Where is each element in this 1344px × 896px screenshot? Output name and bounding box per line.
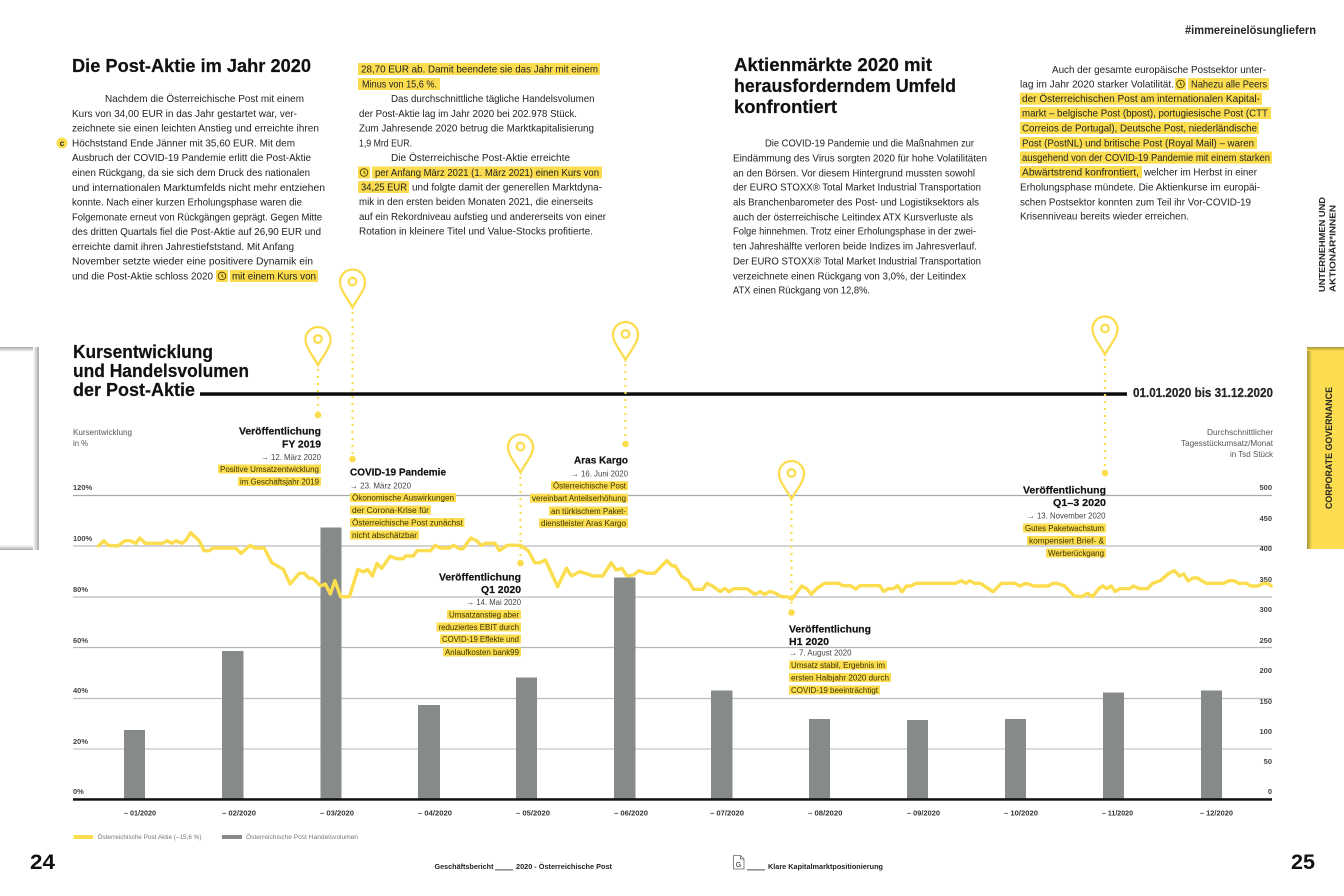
text block: column 3: an den Börsen. Vor diesem Hintergrund mussten sowohl bbox=[733, 168, 975, 180]
tab: corporate governance bbox=[1307, 347, 1344, 549]
marker: Veröffentlichung Q1-3 2020 bbox=[1092, 316, 1118, 476]
footer: chapter title: Klare Kapitalmarktpositionierung bbox=[768, 862, 883, 871]
month labels bbox=[124, 808, 1233, 818]
legend: Österreichische Post Handelsvolumen bbox=[246, 833, 358, 841]
text block: column 4: welcher im Herbst in einer bbox=[1143, 168, 1258, 178]
footer: report title bbox=[434, 862, 612, 871]
callout: Aras Kargo bbox=[530, 454, 628, 528]
callout: Veröffentlichung FY 2019 bbox=[218, 426, 321, 486]
callout: Veröffentlichung H1 2020: Veröffentlichung bbox=[789, 624, 871, 636]
heading: Aktienmärkte 2020: Aktienmärkte 2020 mit bbox=[734, 55, 932, 75]
month labels: – 10/2020 bbox=[1004, 808, 1038, 818]
text block: column 3: als Branchenbarometer des Post- und Logistiksektors als bbox=[733, 198, 979, 208]
left axis title bbox=[73, 428, 132, 448]
side label: Unternehmen und Aktionär*innen: AKTIONÄR*INNEN bbox=[1328, 205, 1338, 292]
callout: Veröffentlichung H1 2020: → 7. August 2020 bbox=[789, 648, 852, 658]
callout: Aras Kargo: → 16. Juni 2020 bbox=[571, 468, 628, 478]
text block: column 1: Kurs von 34,00 EUR in das Jahr gestartet war, ver- bbox=[72, 109, 297, 120]
marker: COVID-19 Pandemie bbox=[340, 270, 365, 462]
right axis title: in Tsd Stück bbox=[1230, 450, 1274, 459]
text block: column 2: 34,25 EUR bbox=[361, 182, 407, 194]
marker: Veröffentlichung Q1 2020 bbox=[508, 434, 533, 566]
text block: column 4: ausgehend von der COVID-19 Pandemie mit einem starken bbox=[1022, 153, 1270, 164]
month labels: – 02/2020 bbox=[222, 808, 256, 818]
month labels: – 05/2020 bbox=[516, 808, 550, 818]
text block: column 2: Das durchschnittliche tägliche Handelsvolumen bbox=[391, 94, 595, 105]
right axis labels: 350 bbox=[1259, 575, 1272, 584]
right axis title bbox=[1181, 428, 1274, 459]
callout: Veröffentlichung H1 2020: COVID-19 beeinträchtigt bbox=[791, 686, 879, 695]
callout: Veröffentlichung Q1-3 2020: Q1–3 2020 bbox=[1053, 497, 1106, 509]
text block: column 4: Nahezu alle Peers bbox=[1191, 80, 1267, 90]
text block: column 4: Auch der gesamte europäische Postsektor unter- bbox=[1052, 65, 1266, 76]
right axis title: Tagesstückumsatz/Monat bbox=[1181, 439, 1274, 448]
text block: column 1: November setzte wieder eine positivere Dynamik ein bbox=[72, 256, 313, 268]
left axis labels: 0% bbox=[73, 787, 84, 796]
month labels: – 12/2020 bbox=[1200, 808, 1233, 818]
callout: Aras Kargo: vereinbart Anteilserhöhung bbox=[532, 494, 626, 503]
right axis labels: 0 bbox=[1268, 787, 1272, 796]
share price line bbox=[98, 533, 1271, 599]
left axis title: in % bbox=[73, 439, 88, 448]
text block: column 1: und internationalen Marktumfelds nicht mehr entziehen bbox=[72, 183, 325, 194]
right axis labels: 500 bbox=[1259, 483, 1272, 492]
text block: column 2: 28,70 EUR ab. Damit beendete sie das Jahr mit einem bbox=[361, 64, 598, 76]
callout: Aras Kargo: Österreichische Post bbox=[553, 482, 627, 491]
callout: COVID-19 Pandemie bbox=[350, 466, 464, 540]
callout: Veröffentlichung Q1-3 2020: Gutes Paketwachstum bbox=[1025, 524, 1104, 533]
text block: column 3: ATX einen Rückgang von 12,8%. bbox=[733, 286, 870, 296]
text block: column 3: verzeichnete einen Rückgang von 3,0%, der Leitindex bbox=[733, 272, 967, 282]
heading: Aktienmärkte 2020: konfrontiert bbox=[734, 97, 837, 117]
left axis labels bbox=[73, 483, 93, 796]
marker: Veröffentlichung H1 2020 bbox=[779, 461, 804, 616]
text block: column 3: Der EURO STOXX® Total Market Industrial Transportation bbox=[733, 256, 981, 268]
callout: Veröffentlichung FY 2019: Positive Umsatzentwicklung bbox=[220, 465, 319, 474]
callout: COVID-19 Pandemie: der Corona-Krise für bbox=[352, 506, 429, 515]
icon: document G: G bbox=[736, 862, 741, 869]
right axis labels bbox=[1259, 483, 1272, 796]
text block: column 4: lag im Jahr 2020 starker Volatilität. bbox=[1020, 80, 1174, 90]
month labels: – 09/2020 bbox=[907, 808, 940, 818]
callout: Veröffentlichung Q1-3 2020: Veröffentlichung bbox=[1023, 484, 1106, 496]
volume bars bbox=[124, 528, 1222, 799]
text block: column 4: Abwärtstrend konfrontiert, bbox=[1022, 168, 1139, 178]
text block: column 1: einen Rückgang, da sie sich dem Druck des nationalen bbox=[72, 168, 310, 179]
callout: Veröffentlichung Q1 2020: Umsatzanstieg aber bbox=[449, 610, 519, 620]
marker: Aras Kargo bbox=[613, 322, 638, 447]
right axis labels: 250 bbox=[1259, 636, 1272, 645]
text block: column 3: Die COVID-19 Pandemie und die Maßnahmen zur bbox=[765, 138, 975, 150]
text block: column 4: Post (PostNL) und britische Post (Royal Mail) – waren bbox=[1022, 138, 1254, 150]
left axis labels: 20% bbox=[73, 737, 88, 746]
right axis labels: 50 bbox=[1264, 757, 1272, 766]
callout: COVID-19 Pandemie: Ökonomische Auswirkungen bbox=[352, 494, 454, 502]
text block: column 2: Rotation in kleinere Titel und Value-Stocks profitierte. bbox=[359, 226, 593, 238]
text block: column 1: zeichnete sie einen leichten Anstieg und erreichte ihren bbox=[72, 124, 319, 134]
text block: column 2: Minus von 15,6 %. bbox=[362, 80, 437, 90]
page number 25: 25 bbox=[1291, 851, 1315, 874]
text block: column 2 bbox=[358, 63, 607, 238]
left axis title: Kursentwicklung bbox=[73, 428, 132, 437]
chart heading: Kursentwicklung bbox=[73, 342, 213, 362]
text block: column 1: Höchststand Ende Jänner mit 35,60 EUR. Mit dem bbox=[72, 138, 295, 150]
icon: document G bbox=[734, 856, 744, 869]
text block: column 2: 1,9 Mrd EUR. bbox=[359, 138, 412, 150]
right axis labels: 450 bbox=[1259, 514, 1272, 523]
text block: column 1: erreichte damit ihren Jahrestiefststand. Mit Anfang bbox=[72, 242, 294, 253]
callout: Veröffentlichung Q1-3 2020 bbox=[1023, 484, 1106, 558]
text block: column 2: mik in den ersten beiden Monaten 2021, die einerseits bbox=[359, 197, 593, 208]
month labels: – 07/2020 bbox=[710, 808, 744, 818]
side label: Unternehmen und Aktionär*innen bbox=[1317, 197, 1338, 292]
text block: column 1: konnte. Nach einer kurzen Erholungsphase waren die bbox=[72, 198, 302, 208]
callout: Veröffentlichung Q1-3 2020: → 13. November 2020 bbox=[1027, 510, 1106, 520]
text block: column 4 bbox=[1020, 65, 1272, 222]
text block: column 2: auf ein Rekordniveau aufstieg und andererseits von einer bbox=[359, 212, 607, 223]
text block: column 1: und die Post-Aktie schloss 2020 bbox=[72, 272, 213, 282]
text block: column 3: Folge hinnehmen. Trotz einer Erholungsphase in der zwei- bbox=[733, 226, 976, 238]
callout: COVID-19 Pandemie: → 23. März 2020 bbox=[350, 480, 411, 490]
callout: Veröffentlichung Q1 2020: → 14. Mai 2020 bbox=[466, 597, 521, 607]
text block: column 1: Nachdem die Österreichische Post mit einem bbox=[105, 93, 304, 105]
text block: column 3: der EURO STOXX® Total Market Industrial Transportation bbox=[733, 182, 981, 194]
side label: Unternehmen und Aktionär*innen: UNTERNEHMEN UND bbox=[1317, 197, 1327, 292]
callout: Veröffentlichung Q1-3 2020: Werberückgang bbox=[1048, 549, 1104, 558]
text block: column 4: Krisenniveau bereits wieder erreichen. bbox=[1020, 212, 1189, 222]
callout: Veröffentlichung H1 2020: H1 2020 bbox=[789, 636, 829, 648]
heading: Aktienmärkte 2020: herausforderndem Umfeld bbox=[734, 76, 956, 96]
right axis labels: 200 bbox=[1259, 666, 1272, 675]
callout: Veröffentlichung H1 2020 bbox=[789, 624, 891, 695]
callout: Veröffentlichung H1 2020: Umsatz stabil, Ergebnis im bbox=[791, 661, 885, 670]
heading: Die Post-Aktie im Jahr 2020: Die Post-Aktie im Jahr 2020 bbox=[72, 56, 311, 76]
tab: left page edge bbox=[0, 347, 39, 550]
text block: column 4: markt – belgische Post (bpost), portugiesische Post (CTT bbox=[1022, 108, 1269, 120]
right axis labels: 300 bbox=[1259, 605, 1272, 614]
callout: Veröffentlichung Q1 2020: Veröffentlichung bbox=[439, 572, 521, 584]
left axis labels: 120% bbox=[73, 483, 93, 492]
callout: Veröffentlichung Q1 2020: Q1 2020 bbox=[481, 584, 521, 596]
callout: Veröffentlichung Q1 2020 bbox=[436, 572, 521, 657]
month labels: – 06/2020 bbox=[614, 808, 648, 818]
callout: Aras Kargo: an türkischem Paket- bbox=[551, 507, 626, 516]
text block: column 4: der Österreichischen Post am internationalen Kapital- bbox=[1022, 93, 1260, 105]
left axis labels: 40% bbox=[73, 686, 88, 695]
text block: column 1 bbox=[72, 93, 325, 282]
text block: column 2: der Post-Aktie lag im Jahr 2020 bei 202.978 Stück. bbox=[359, 109, 577, 120]
text block: column 3: auch der österreichische Leitindex ATX Kursverluste als bbox=[733, 212, 973, 224]
text block: column 3: Eindämmung des Virus sorgten 2020 für hohe Volatilitäten bbox=[733, 154, 987, 164]
callout: Veröffentlichung FY 2019: im Geschäftsjahr 2019 bbox=[240, 478, 320, 486]
chart heading bbox=[73, 342, 249, 400]
footer: report title: 2020 - Österreichische Post bbox=[516, 862, 612, 871]
text block: column 3 bbox=[733, 138, 987, 296]
marker: Veröffentlichung FY 2019 bbox=[306, 327, 330, 418]
right axis labels: 400 bbox=[1259, 544, 1272, 553]
hashtag: #immereinelösungliefern bbox=[1185, 23, 1316, 37]
chart heading: und Handelsvolumen bbox=[73, 361, 249, 381]
chart: share price and trading volume bbox=[73, 483, 1272, 818]
text block: column 1: des dritten Quartals fiel die Post-Aktie auf 26,90 EUR und bbox=[72, 227, 321, 238]
month labels: – 01/2020 bbox=[124, 808, 156, 818]
text block: column 1: Folgemonate erneut von Rückgängen geprägt. Gegen Mitte bbox=[72, 212, 322, 224]
month labels: – 11/2020 bbox=[1102, 808, 1133, 818]
heading: Aktienmärkte 2020 bbox=[734, 55, 956, 117]
text block: column 2: Die Österreichische Post-Aktie erreichte bbox=[391, 152, 570, 164]
text block: column 4: Correios de Portugal), Deutsche Post, niederländische bbox=[1022, 124, 1257, 134]
page number 24: 24 bbox=[30, 851, 55, 874]
text block: column 1: Ausbruch der COVID-19 Pandemie erlitt die Post-Aktie bbox=[72, 153, 311, 164]
tab: corporate governance: CORPORATE GOVERNANCE bbox=[1324, 387, 1334, 509]
text block: column 3: ten Jahreshälfte verloren beide Indizes im Jahresverlauf. bbox=[733, 242, 977, 252]
footer: report title: Geschäftsbericht bbox=[434, 862, 494, 871]
right axis labels: 150 bbox=[1259, 697, 1272, 706]
callout: Veröffentlichung Q1 2020: Anlaufkosten bank99 bbox=[445, 648, 520, 657]
text block: column 2: und folgte damit der generellen Marktdyna- bbox=[412, 182, 602, 194]
callout: Veröffentlichung Q1 2020: COVID-19 Effekte und bbox=[442, 635, 519, 644]
text block: column 2: per Anfang März 2021 (1. März 2021) einen Kurs von bbox=[375, 168, 599, 179]
month labels: – 04/2020 bbox=[418, 808, 452, 818]
left axis labels: 60% bbox=[73, 636, 88, 645]
callout: Veröffentlichung H1 2020: ersten Halbjahr 2020 durch bbox=[791, 674, 889, 682]
left axis labels: 80% bbox=[73, 585, 88, 594]
callout: COVID-19 Pandemie: COVID-19 Pandemie bbox=[350, 466, 446, 478]
callout: Veröffentlichung FY 2019: Veröffentlichung bbox=[239, 426, 321, 438]
month labels: – 08/2020 bbox=[808, 808, 842, 818]
legend bbox=[74, 833, 358, 841]
callout: Veröffentlichung Q1 2020: reduziertes EBIT durch bbox=[438, 623, 519, 632]
left axis labels: 100% bbox=[73, 534, 93, 543]
month labels: – 03/2020 bbox=[320, 808, 354, 818]
callout: Veröffentlichung Q1-3 2020: kompensiert Brief- & bbox=[1029, 536, 1105, 546]
icon: glossary marker c: c bbox=[60, 138, 65, 148]
icon: glossary marker c bbox=[56, 138, 68, 148]
callout: Veröffentlichung FY 2019: FY 2019 bbox=[282, 438, 321, 450]
callout: Aras Kargo: Aras Kargo bbox=[574, 454, 628, 466]
right axis title: Durchschnittlicher bbox=[1207, 428, 1273, 437]
callout: Veröffentlichung FY 2019: → 12. März 2020 bbox=[261, 452, 321, 462]
callout: Aras Kargo: dienstleister Aras Kargo bbox=[541, 519, 627, 528]
text block: column 2: Zum Jahresende 2020 betrug die Marktkapitalisierung bbox=[359, 124, 594, 134]
callout: COVID-19 Pandemie: Österreichische Post zunächst bbox=[352, 518, 463, 528]
date range: 01.01.2020 bis 31.12.2020 bbox=[1133, 386, 1273, 400]
callout: COVID-19 Pandemie: nicht abschätzbar bbox=[352, 531, 417, 540]
right axis labels: 100 bbox=[1259, 727, 1272, 736]
legend: Österreichische Post Aktie (–15,6 %) bbox=[98, 833, 202, 841]
text block: column 4: schen Postsektor konnten zum Teil ihr Vor-COVID-19 bbox=[1020, 198, 1251, 208]
text block: column 4: Erholungsphase mündete. Die Aktienkurse im europäi- bbox=[1020, 182, 1260, 194]
chart heading: der Post-Aktie bbox=[73, 380, 195, 400]
text block: column 1: mit einem Kurs von bbox=[232, 272, 316, 282]
